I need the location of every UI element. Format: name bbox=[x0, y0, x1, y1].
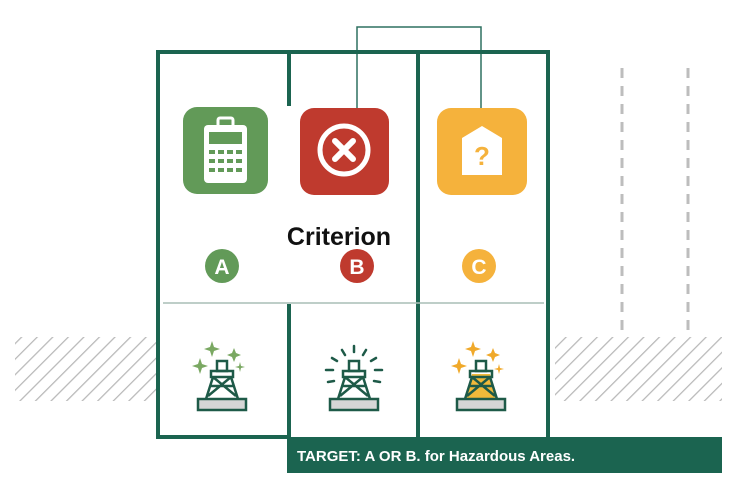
badge A bbox=[205, 249, 239, 283]
hatch: right bbox=[555, 337, 722, 401]
badge C bbox=[462, 249, 496, 283]
icon: calculator bbox=[183, 107, 268, 194]
tower B bbox=[326, 346, 382, 410]
badge B bbox=[340, 249, 374, 283]
target banner: TARGET: A OR B. for Hazardous Areas. bbox=[297, 448, 575, 465]
hatch: left bbox=[15, 337, 158, 401]
badge A: A bbox=[214, 256, 230, 279]
main frame bbox=[158, 50, 550, 437]
tower C bbox=[451, 341, 505, 410]
dashed guide lines bbox=[622, 68, 688, 330]
target banner bbox=[287, 437, 722, 473]
icon: cross bbox=[300, 108, 389, 195]
connector bracket bbox=[357, 27, 481, 108]
icon: house question bbox=[437, 108, 527, 195]
badge C: C bbox=[471, 256, 487, 279]
badge B: B bbox=[349, 256, 365, 279]
icon: house question: ? bbox=[474, 141, 490, 171]
heading: Criterion: Criterion bbox=[287, 223, 391, 251]
tower A bbox=[192, 341, 246, 410]
